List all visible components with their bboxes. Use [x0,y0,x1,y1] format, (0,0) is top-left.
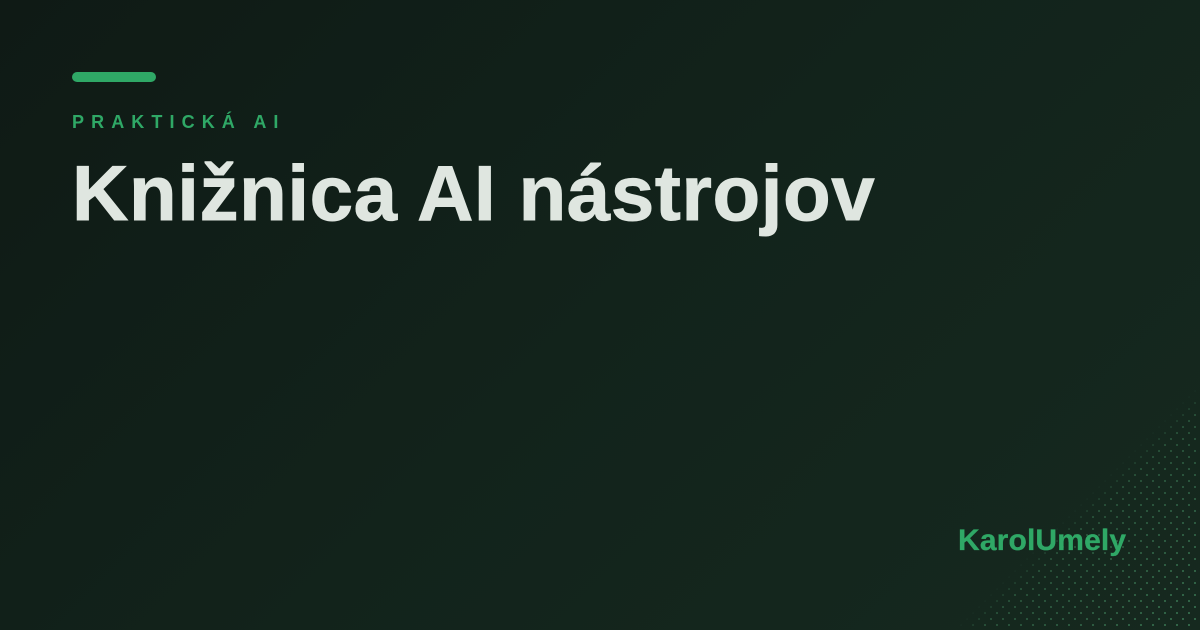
eyebrow label: PRAKTICKÁ AI [72,112,286,132]
title: Knižnica AI nástrojov [72,149,875,237]
accent bar [72,72,156,82]
dot pattern in bottom-right corner [972,402,1196,626]
brand wordmark: KarolUmely [958,524,1126,557]
